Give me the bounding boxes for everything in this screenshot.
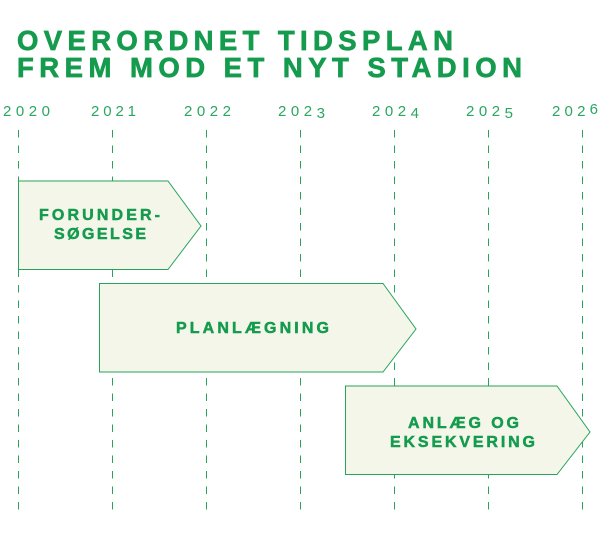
- year labels: 5: [505, 105, 513, 122]
- year labels: 3: [317, 105, 325, 122]
- year labels: 6: [590, 101, 598, 118]
- title: OVERORDNET TIDSPLAN: [17, 25, 453, 56]
- arrow: anlæg og eksekvering: ANLÆG OG: [408, 415, 519, 432]
- year labels: 202: [372, 103, 406, 120]
- year labels: 4: [411, 105, 419, 122]
- arrow: forundersøgelse: [18, 181, 201, 270]
- arrow: forundersøgelse: FORUNDER-: [39, 207, 160, 224]
- year labels: 202: [278, 103, 312, 120]
- year labels: 2020: [3, 103, 50, 120]
- arrow: anlæg og eksekvering: EKSEKVERING: [390, 434, 535, 451]
- year labels: 202: [466, 103, 500, 120]
- year labels: 202: [552, 103, 585, 120]
- arrow: planlægning: [100, 284, 416, 372]
- year labels: 2021: [91, 103, 136, 120]
- arrow: forundersøgelse: SØGELSE: [54, 226, 146, 243]
- title: [17, 25, 522, 83]
- title: FREM MOD ET NYT STADION: [17, 52, 522, 83]
- arrow: planlægning: PLANLÆGNING: [176, 320, 329, 337]
- year labels: 2022: [184, 103, 231, 120]
- year labels: [3, 101, 598, 122]
- arrow: anlæg og eksekvering: [346, 386, 590, 474]
